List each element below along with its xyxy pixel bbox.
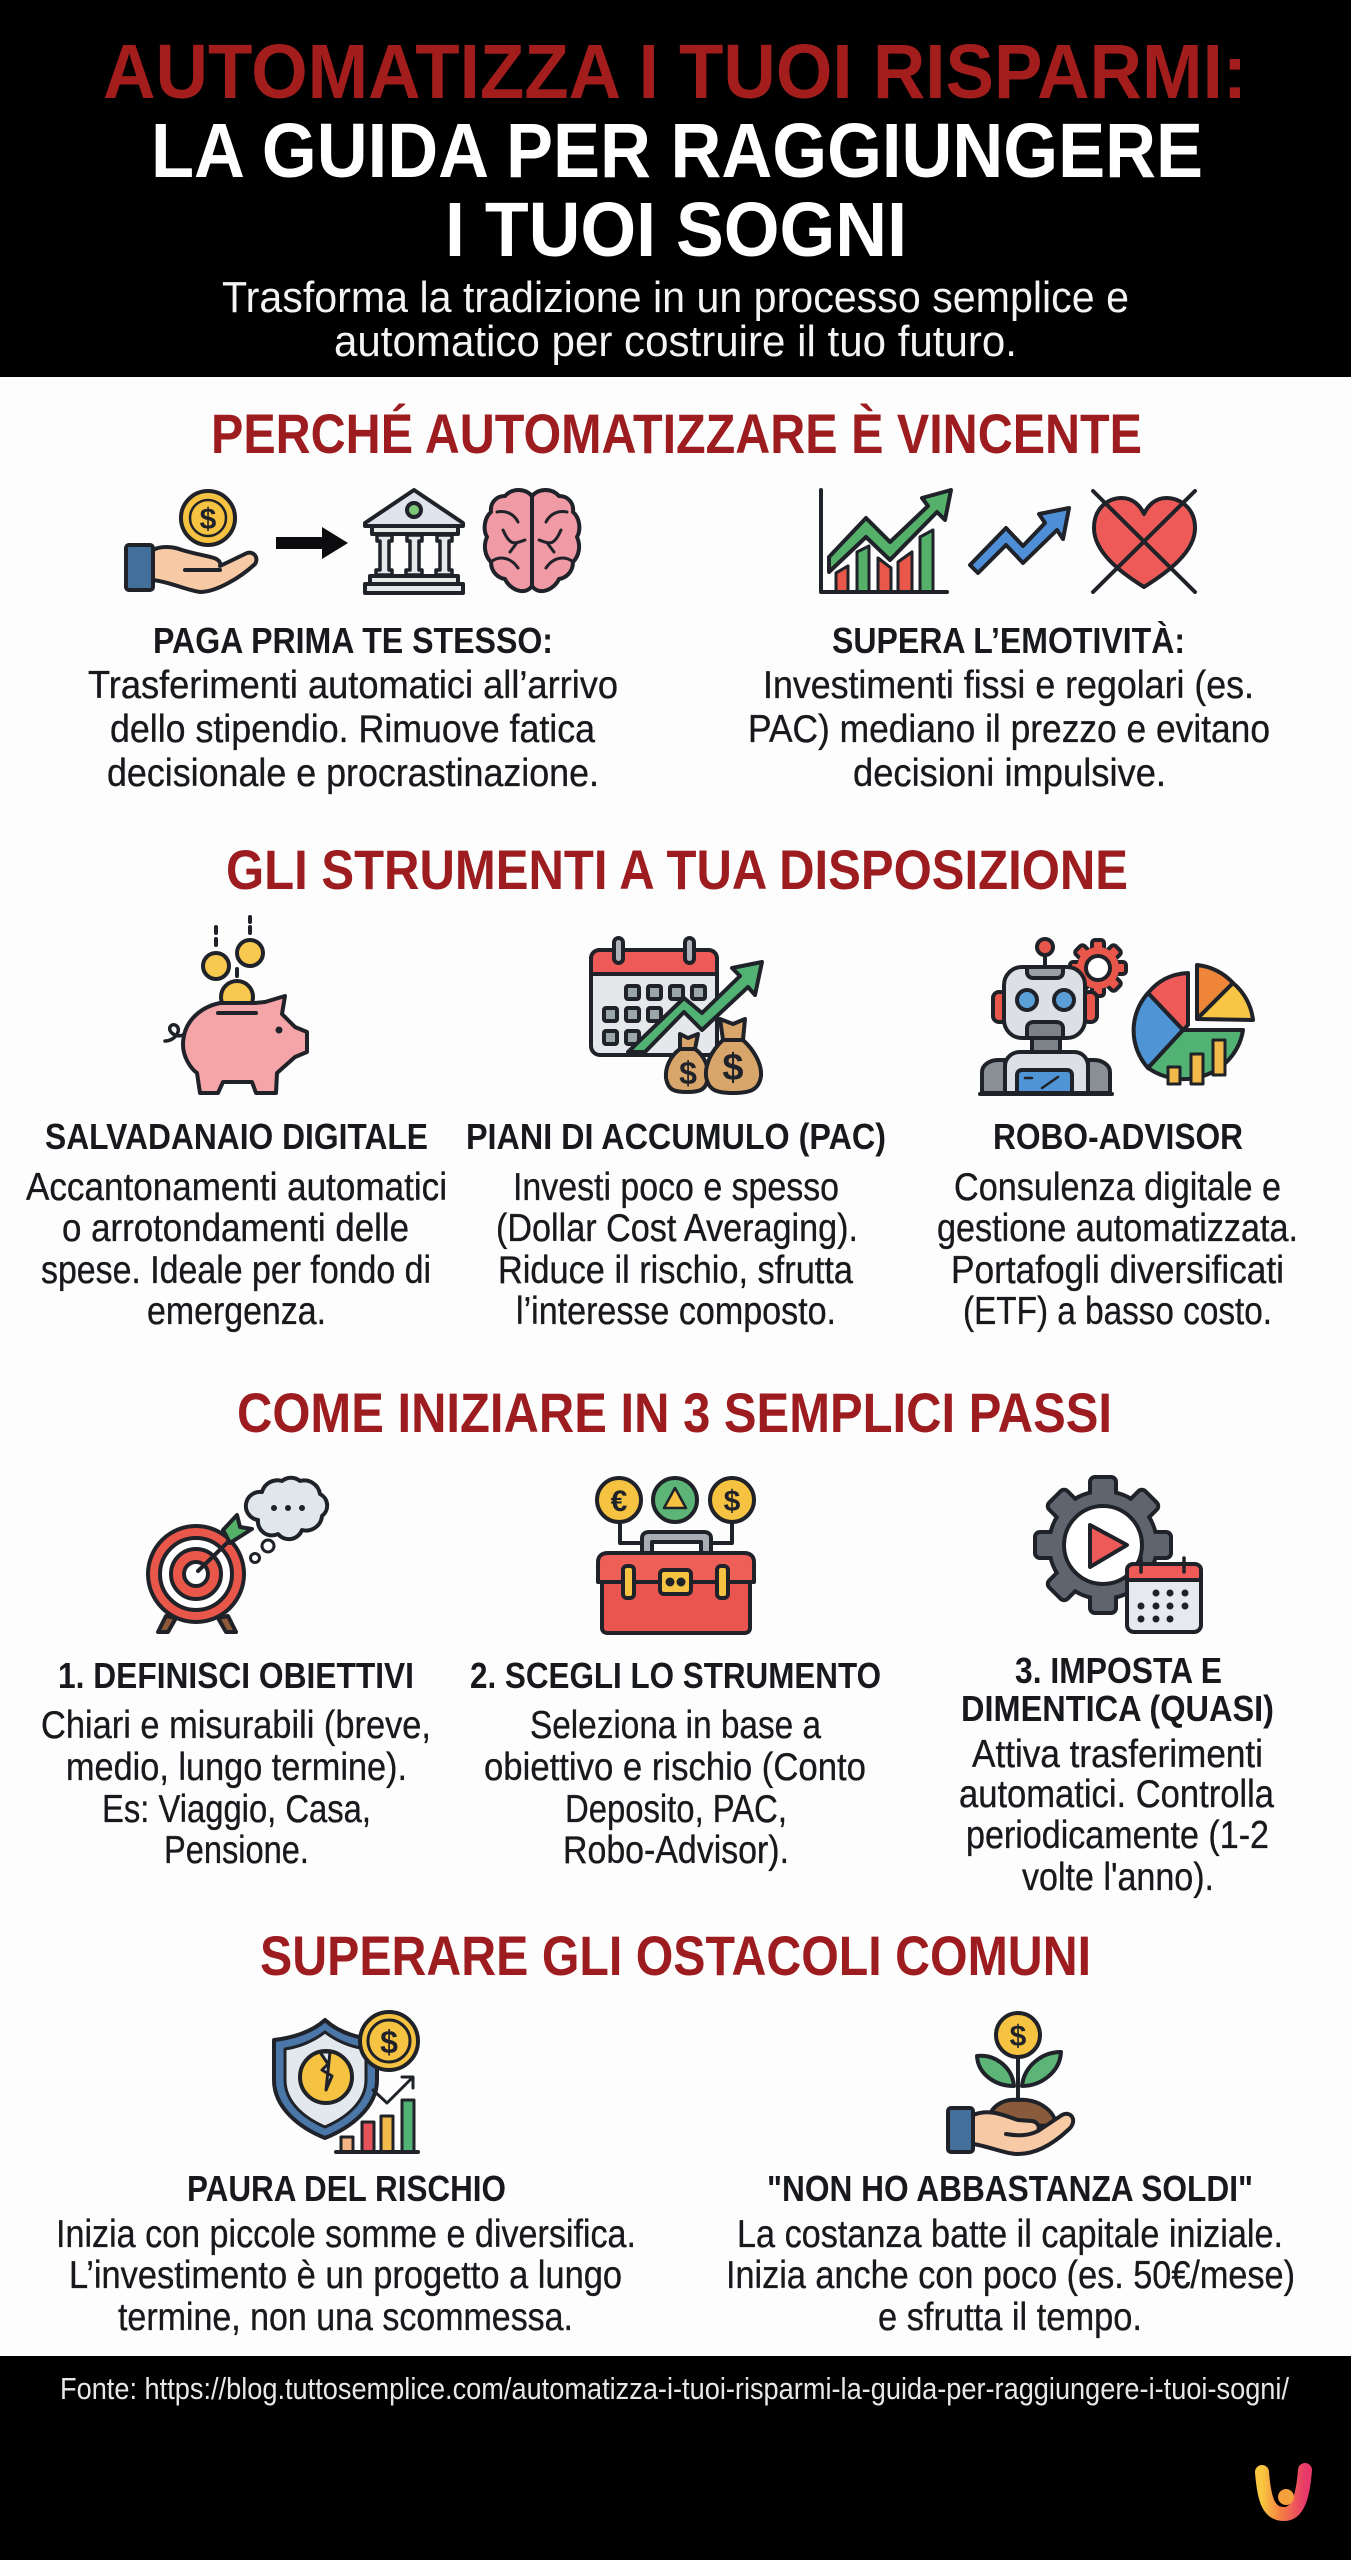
text block: definisci obiettivi: Chiari e misurabili (breve,: [41, 1704, 431, 1747]
text block: supera l'emotività: decisioni impulsive.: [853, 752, 1166, 795]
icon: blue arrow: [970, 508, 1069, 573]
panel: perché automatizzare: [88, 402, 1270, 795]
text block: salvadanaio digitale: Accantonamenti automatici: [26, 1166, 447, 1209]
text block: definisci obiettivi: Es: Viaggio, Casa,: [102, 1788, 371, 1831]
text block: non ho abbastanza soldi: La costanza batte il capitale iniziale.: [737, 2213, 1283, 2256]
text block: paura del rischio: [56, 2168, 636, 2339]
text block: scegli lo strumento: 2. SCEGLI LO STRUMENTO: [470, 1655, 881, 1696]
icon: bank: [365, 490, 463, 593]
text block: imposta e dimentica: periodicamente (1-2: [966, 1814, 1269, 1857]
panel: ostacoli: [56, 1924, 1295, 2339]
icon: crossed heart: [1093, 491, 1195, 592]
text block: imposta e dimentica: [959, 1650, 1275, 1899]
text block: piani di accumulo: PIANI DI ACCUMULO (PAC): [466, 1116, 886, 1157]
header band: [0, 0, 1351, 377]
text block: scegli lo strumento: obiettivo e rischio (Conto: [484, 1746, 866, 1789]
heading: perché automatizzare: PERCHÉ AUTOMATIZZARE È VINCENTE: [211, 402, 1142, 465]
text block: non ho abbastanza soldi: "NON HO ABBASTANZA SOLDI": [767, 2168, 1253, 2209]
text block: scegli lo strumento: [470, 1655, 881, 1872]
text block: salvadanaio digitale: emergenza.: [147, 1290, 326, 1333]
text block: paga prima te stesso: Trasferimenti automatici all’arrivo: [88, 664, 618, 707]
icon: toolbox with coins: $: [724, 1485, 741, 1518]
text block: non ho abbastanza soldi: e sfrutta il tempo.: [878, 2296, 1142, 2339]
text block: robo-advisor: Consulenza digitale e: [954, 1166, 1281, 1209]
heading: passi: COME INIZIARE IN 3 SEMPLICI PASSI: [237, 1381, 1112, 1444]
icon: shield with coin and bars: [274, 2012, 418, 2152]
text block: salvadanaio digitale: [26, 1116, 447, 1333]
text block: supera l'emotività: Investimenti fissi e regolari (es.: [763, 664, 1254, 707]
text block: paga prima te stesso: PAGA PRIMA TE STESSO:: [153, 620, 553, 661]
subtitle: automatico per costruire il tuo futuro.: [334, 317, 1017, 366]
arrow: [276, 527, 348, 559]
icon: growth chart: [821, 490, 951, 592]
text block: piani di accumulo: Riduce il rischio, sfrutta: [498, 1249, 854, 1292]
icon: toolbox with coins: [597, 1478, 754, 1633]
icon: calendar with arrow and money bags: [591, 938, 762, 1093]
text block: paura del rischio: PAURA DEL RISCHIO: [187, 2168, 506, 2209]
title: I TUOI SOGNI: [445, 187, 907, 273]
text block: paura del rischio: termine, non una scommessa.: [118, 2296, 573, 2339]
text block: piani di accumulo: [466, 1116, 886, 1333]
text block: salvadanaio digitale: spese. Ideale per fondo di: [41, 1249, 431, 1292]
text block: robo-advisor: gestione automatizzata.: [937, 1207, 1298, 1250]
text block: salvadanaio digitale: o arrotondamenti delle: [62, 1207, 409, 1250]
icon: robot with gear: [980, 939, 1126, 1094]
text block: paga prima te stesso: [88, 620, 618, 795]
text block: definisci obiettivi: 1. DEFINISCI OBIETTIVI: [58, 1655, 414, 1696]
icon: pie chart: [1134, 965, 1253, 1084]
text block: scegli lo strumento: Robo-Advisor).: [563, 1829, 789, 1872]
heading: ostacoli: SUPERARE GLI OSTACOLI COMUNI: [260, 1924, 1091, 1987]
text block: imposta e dimentica: automatici. Controlla: [959, 1773, 1275, 1816]
text block: robo-advisor: (ETF) a basso costo.: [963, 1290, 1272, 1333]
title: LA GUIDA PER RAGGIUNGERE: [151, 108, 1203, 194]
text block: imposta e dimentica: 3. IMPOSTA E: [1015, 1650, 1222, 1691]
text block: imposta e dimentica: Attiva trasferimenti: [972, 1733, 1263, 1776]
text block: definisci obiettivi: medio, lungo termine).: [66, 1746, 407, 1789]
icon: gear with play and calendar: [1035, 1477, 1201, 1632]
text block: supera l'emotività: PAC) mediano il prezzo e evitano: [748, 708, 1270, 751]
text block: robo-advisor: ROBO-ADVISOR: [993, 1116, 1243, 1157]
icon: calendar with arrow and money bags: $: [679, 1055, 697, 1091]
text block: robo-advisor: Portafogli diversificati: [951, 1249, 1284, 1292]
text block: scegli lo strumento: Deposito, PAC,: [565, 1788, 787, 1831]
icon: target with thought cloud: [148, 1478, 327, 1632]
text block: supera l'emotività: [748, 620, 1270, 795]
panel: passi: [41, 1381, 1275, 1899]
heading: strumenti: GLI STRUMENTI A TUA DISPOSIZIONE: [226, 838, 1128, 901]
text block: paura del rischio: L’investimento è un progetto a lungo: [69, 2254, 622, 2297]
icon: plant growing from hand: $: [1010, 2020, 1027, 2053]
text block: piani di accumulo: l’interesse composto.: [516, 1290, 836, 1333]
text block: robo-advisor: [937, 1116, 1298, 1333]
text block: paura del rischio: Inizia con piccole somme e diversifica.: [56, 2213, 636, 2256]
title: AUTOMATIZZA I TUOI RISPARMI:: [103, 29, 1247, 115]
text block: piani di accumulo: Investi poco e spesso: [513, 1166, 839, 1209]
logo: [1262, 2470, 1305, 2514]
text block: paga prima te stesso: decisionale e procrastinazione.: [107, 752, 599, 795]
panel: strumenti: [26, 838, 1298, 1333]
text block: scegli lo strumento: Seleziona in base a: [530, 1704, 821, 1747]
text block: non ho abbastanza soldi: [726, 2168, 1295, 2339]
icon: hand with coin: $: [200, 503, 217, 536]
text block: imposta e dimentica: volte l'anno).: [1022, 1856, 1214, 1899]
subtitle: [222, 273, 1129, 366]
icon: calendar with arrow and money bags: $: [722, 1047, 744, 1089]
text block: salvadanaio digitale: SALVADANAIO DIGITALE: [45, 1116, 428, 1157]
subtitle: Trasforma la tradizione in un processo semplice e: [222, 273, 1129, 322]
text block: imposta e dimentica: DIMENTICA (QUASI): [961, 1688, 1274, 1729]
text block: piani di accumulo: (Dollar Cost Averaging).: [496, 1207, 858, 1250]
text block: definisci obiettivi: Pensione.: [164, 1829, 309, 1872]
text block: definisci obiettivi: [41, 1655, 431, 1872]
text block: non ho abbastanza soldi: Inizia anche con poco (es. 50€/mese): [726, 2254, 1295, 2297]
icon: shield with coin and bars: $: [380, 2024, 398, 2060]
icon: hand with coin: [126, 491, 256, 592]
title: [103, 29, 1247, 273]
footer band: [0, 2356, 1351, 2560]
icon: brain: [485, 490, 579, 591]
text block: supera l'emotività: SUPERA L’EMOTIVITÀ:: [832, 620, 1185, 661]
icon: toolbox with coins: €: [611, 1485, 628, 1518]
icon: plant growing from hand: [948, 2013, 1073, 2154]
icon: piggy bank: [165, 917, 307, 1093]
text block: paga prima te stesso: dello stipendio. Rimuove fatica: [110, 708, 596, 751]
